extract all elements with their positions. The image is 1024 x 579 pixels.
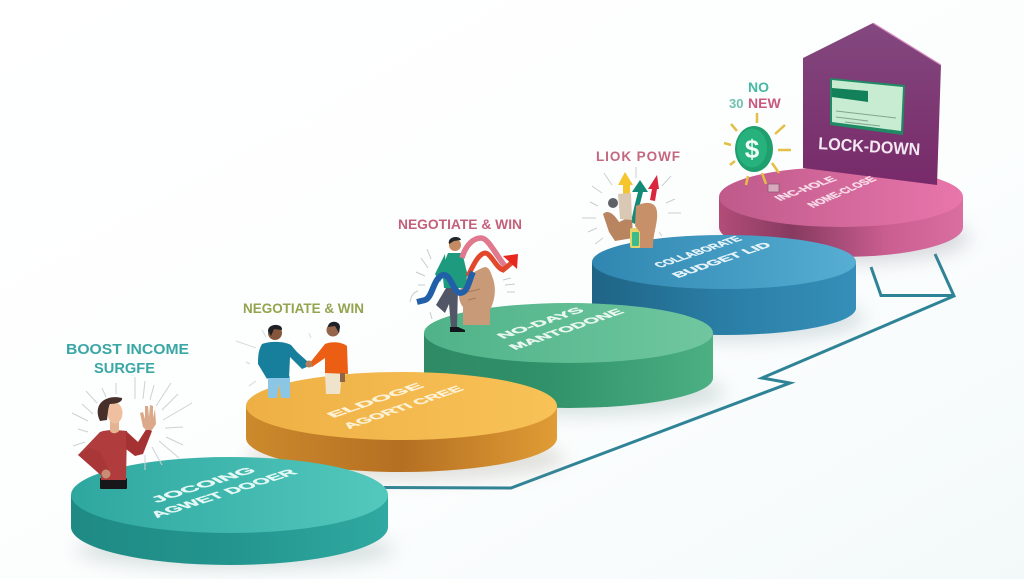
- pink platform label: [772, 175, 880, 210]
- heading: no 30 new: 30: [729, 96, 743, 111]
- platform label: [147, 465, 301, 519]
- platform label: NO-DAYS: [493, 306, 588, 340]
- heading: boost income surge: BOOST INCOME: [66, 342, 189, 358]
- platform label: COLLABORATE: [650, 234, 745, 269]
- step 3: green platform: [424, 303, 725, 416]
- pink platform label: NOME-CLOSE: [805, 175, 880, 210]
- platform label: BUDGET LID: [668, 240, 775, 279]
- figure: two people shaking hands: [236, 322, 348, 398]
- path line: [384, 254, 954, 488]
- pink platform label: INC-HOLE: [772, 175, 840, 203]
- platform label: MANTODONE: [505, 307, 627, 351]
- heading: negotiate and win (olive): NEGOTIATE & WIN: [243, 300, 364, 316]
- heading: boost income surge: [66, 342, 189, 377]
- step 2: yellow platform: [245, 372, 565, 480]
- platform label: AGORTI CREE: [339, 384, 467, 430]
- platform label: JOCOING: [147, 465, 260, 504]
- platform label: [493, 306, 627, 351]
- house label: LOCK-DOWN: [818, 134, 921, 159]
- platform label: [650, 234, 775, 279]
- heading: negotiate and win (pink): NEGOTIATE & WIN: [398, 216, 522, 232]
- icon: hand with arrows: [582, 167, 681, 248]
- figure: waving man with rays: [72, 377, 192, 489]
- heading: no 30 new: NEW: [748, 95, 781, 111]
- step 4: blue platform: [592, 234, 865, 342]
- heading: no 30 new: [729, 79, 781, 111]
- platform label: [323, 381, 467, 430]
- heading: no 30 new: NO: [748, 79, 769, 95]
- icon: bill card: [830, 78, 905, 135]
- heading: boost income surge: SURGFE: [94, 361, 155, 377]
- platform label: AGWET DOOER: [147, 467, 301, 519]
- figure: person with fist and trend lines: [410, 237, 518, 332]
- step 1: teal platform: [71, 457, 395, 570]
- lock-down house: [803, 23, 941, 185]
- step 5: pink platform: [719, 167, 970, 264]
- heading: liok powf: LIOK POWF: [596, 149, 680, 164]
- icon: dollar coin with rays: $: [745, 134, 760, 164]
- icon: dollar coin with rays: [724, 113, 791, 192]
- platform label: ELDOGE: [323, 381, 427, 419]
